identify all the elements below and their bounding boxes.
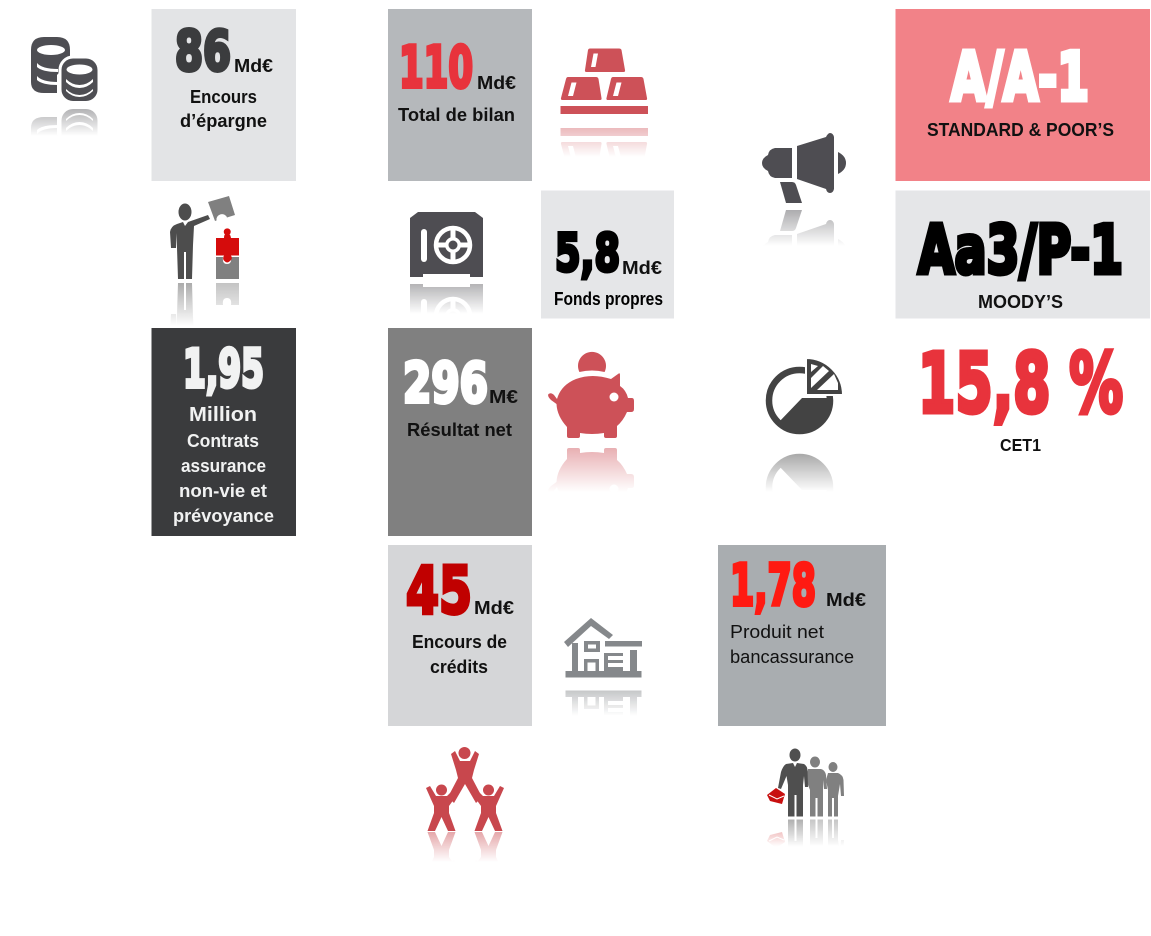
panel: résultat net — [388, 328, 532, 536]
label: bancassurance: bancassurance — [730, 646, 854, 667]
icon: gold bars — [560, 48, 648, 154]
label: assurance: assurance — [181, 456, 266, 476]
pie chart hatched slice — [806, 358, 843, 395]
panel: encours de crédits — [388, 545, 532, 726]
label: Encours de: Encours de — [412, 632, 507, 652]
panel: moody's — [896, 190, 1150, 318]
value: 86: 86 — [175, 19, 231, 83]
kpi: CET1 — [918, 337, 1123, 455]
icon: pie chart — [766, 359, 842, 488]
icon: megaphone — [762, 133, 846, 242]
icon: piggy bank — [548, 352, 634, 488]
label: d'épargne: d’épargne — [180, 111, 267, 131]
icon: human pyramid — [426, 747, 504, 859]
puzzle: top piece — [208, 196, 235, 221]
label: Million: Million — [189, 404, 257, 426]
value: A/A-1: A/A-1 — [951, 38, 1089, 116]
unit: Md€: Md€ — [477, 72, 516, 93]
label: Encours: Encours — [190, 87, 257, 107]
label: Total de bilan: Total de bilan — [398, 105, 515, 125]
value: 5,8: 5,8 — [555, 224, 620, 284]
panel: contrats assurance — [152, 328, 296, 536]
panel: total de bilan — [388, 9, 532, 181]
icon: coins — [31, 37, 98, 133]
unit: Md€: Md€ — [622, 257, 662, 278]
unit: Md€: Md€ — [234, 55, 273, 76]
label: crédits: crédits — [430, 657, 488, 677]
unit: M€: M€ — [489, 386, 518, 407]
unit: Md€: Md€ — [826, 589, 866, 610]
icon: safe — [410, 212, 483, 310]
value: 45: 45 — [406, 554, 472, 629]
label: CET1: CET1 — [1000, 435, 1041, 455]
label: MOODY'S: MOODY’S — [978, 292, 1063, 312]
panel: fonds propres — [541, 190, 674, 318]
value: 110: 110 — [399, 35, 473, 101]
puzzle: red piece — [216, 228, 239, 262]
panel: standard and poor's — [896, 9, 1150, 181]
unit: Md€: Md€ — [474, 597, 514, 618]
piggy bank coin — [578, 352, 606, 372]
panel: produit net bancassurance — [718, 545, 886, 726]
value: 1,78: 1,78 — [730, 553, 816, 619]
icon: house — [564, 618, 642, 712]
label: non-vie et: non-vie et — [179, 481, 267, 501]
label: Fonds propres: Fonds propres — [554, 289, 663, 309]
value: 1,95: 1,95 — [183, 339, 264, 400]
label: Produit net: Produit net — [730, 621, 824, 642]
panel: encours d'épargne — [152, 9, 296, 181]
label: STANDARD & POOR'S: STANDARD & POOR’S — [927, 120, 1114, 140]
icon: businessman with puzzle — [170, 196, 239, 322]
label: prévoyance: prévoyance — [173, 506, 274, 526]
label: Résultat net: Résultat net — [407, 420, 512, 440]
label: Contrats: Contrats — [187, 431, 259, 451]
icon: business team — [767, 748, 844, 844]
value: 296: 296 — [403, 351, 488, 415]
